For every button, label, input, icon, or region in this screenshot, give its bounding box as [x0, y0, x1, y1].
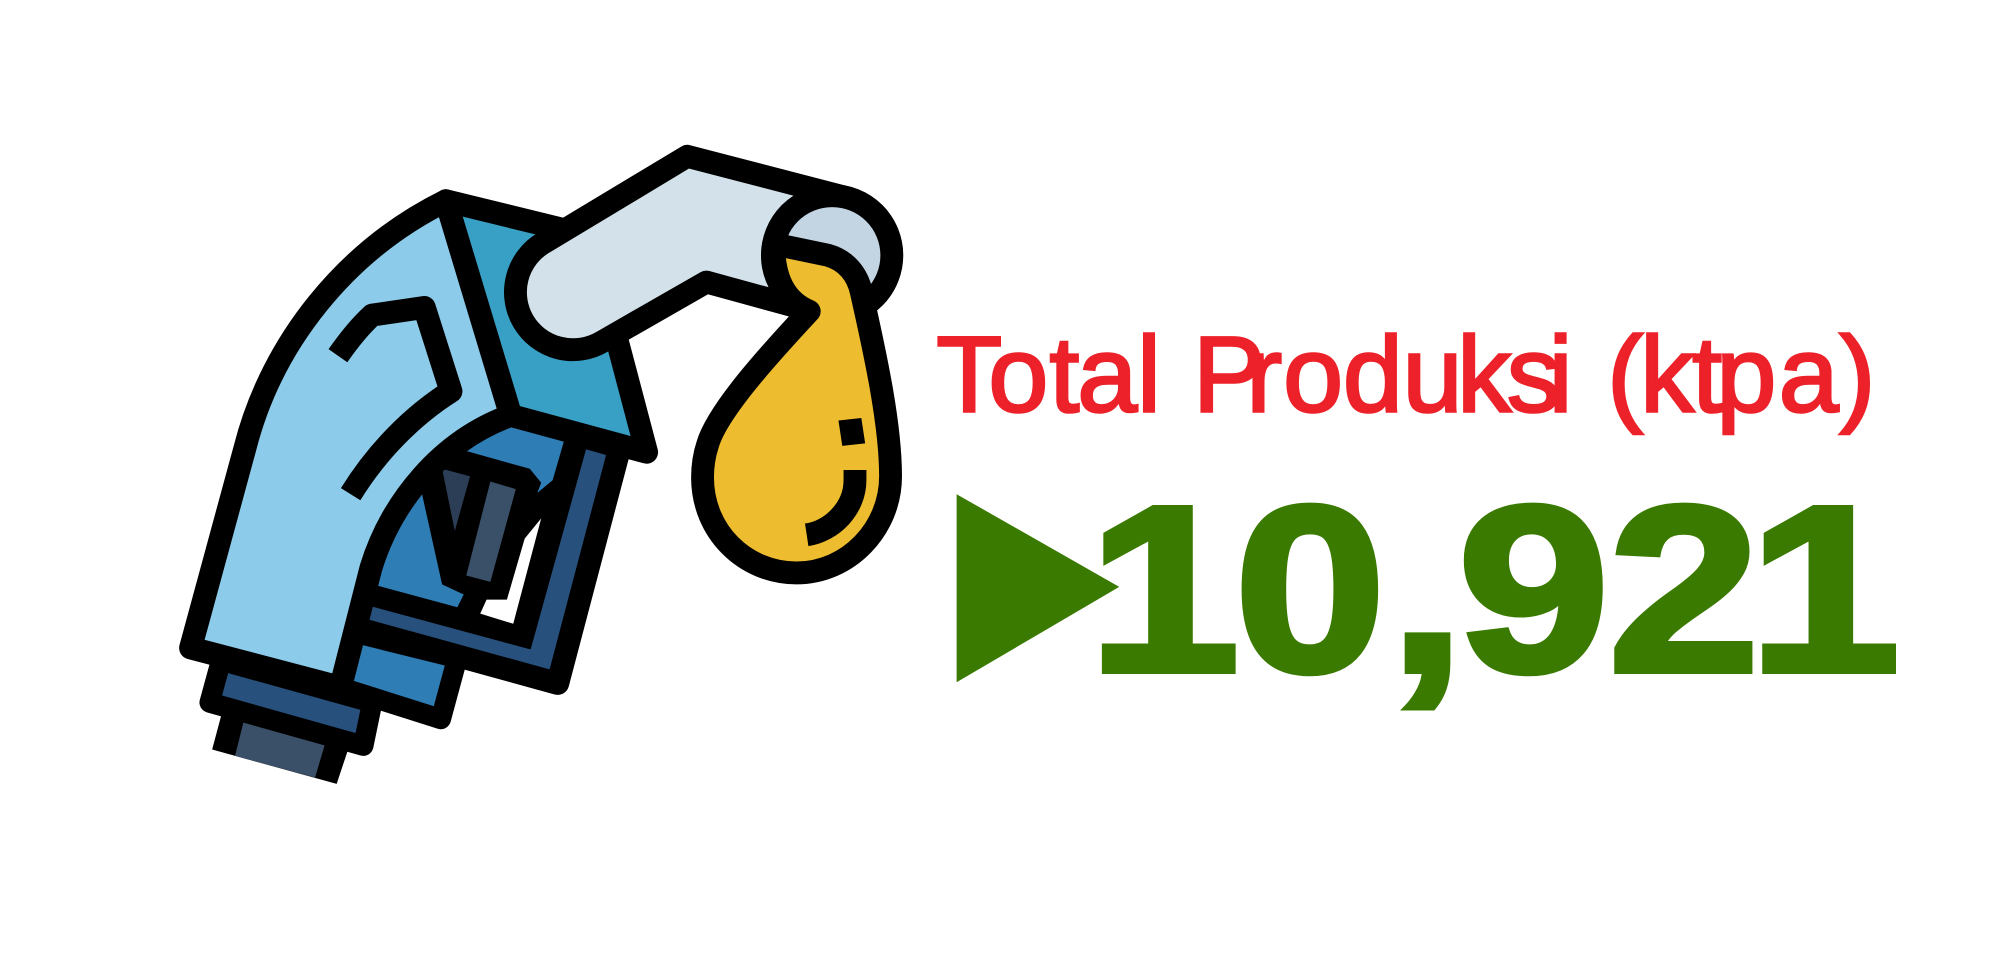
value: 10,921: [1088, 456, 1900, 721]
fuel drop: [703, 244, 891, 573]
nozzle tip: [212, 711, 349, 784]
spout tube: [515, 156, 849, 350]
nozzle body: [191, 201, 511, 687]
trigger housing: [346, 415, 620, 683]
spout opening: [772, 196, 892, 315]
trigger: [442, 469, 516, 582]
icon: fuel pump nozzle with drop: [191, 156, 892, 784]
heading: total production: TotalProduksi(ktpa): [936, 314, 1876, 435]
icon: up triangle marker: [957, 494, 1119, 682]
handle outline: [338, 307, 451, 494]
drop highlight: [807, 418, 865, 535]
nozzle upper block: [446, 201, 647, 452]
lower barrel piece: [340, 633, 457, 719]
collar: [210, 661, 372, 746]
